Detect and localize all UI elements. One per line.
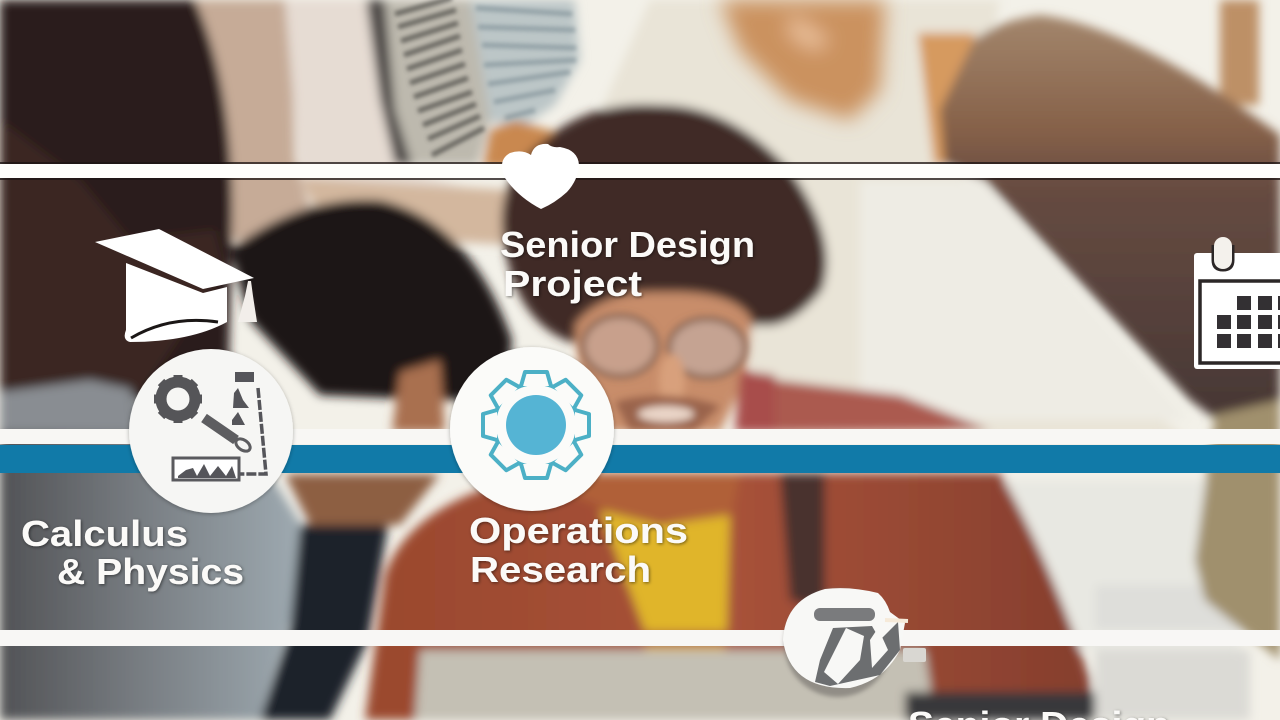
laptop highlight — [903, 648, 926, 662]
middle timeline band: white and blue — [0, 429, 1280, 473]
top white timeline line — [0, 162, 1280, 180]
icon: ruler — [232, 372, 266, 474]
heading: Senior Design Project: Project — [503, 263, 642, 304]
label: Operations Research: Operations — [469, 510, 688, 551]
icon: chart box — [173, 458, 239, 480]
label: Calculus & Physics — [21, 513, 244, 592]
label: Calculus & Physics: & Physics — [57, 551, 244, 592]
icon: gear outline — [483, 372, 589, 478]
back stripes — [476, 8, 576, 118]
icon: heart — [502, 144, 579, 209]
sleeve stripes — [395, 0, 484, 155]
label: Calculus & Physics: Calculus — [21, 513, 188, 554]
label: Operations Research: Research — [470, 549, 651, 590]
label: Operations Research — [469, 510, 688, 590]
node: senior design circular icon — [783, 588, 908, 697]
blurred face at top — [720, 0, 885, 120]
heading: Senior Design Project — [500, 224, 755, 304]
icon: graduation cap — [95, 229, 257, 342]
face details: glasses and smile — [583, 316, 745, 430]
icon: calendar — [1194, 237, 1280, 369]
node: calculus and physics icon — [129, 349, 293, 513]
node: operations research gear icon — [450, 347, 614, 511]
icon: gear — [154, 375, 202, 423]
icon: pencil — [204, 418, 252, 454]
bottom white timeline line — [0, 630, 1280, 646]
heading: Senior Design Project: Senior Design — [500, 224, 755, 265]
